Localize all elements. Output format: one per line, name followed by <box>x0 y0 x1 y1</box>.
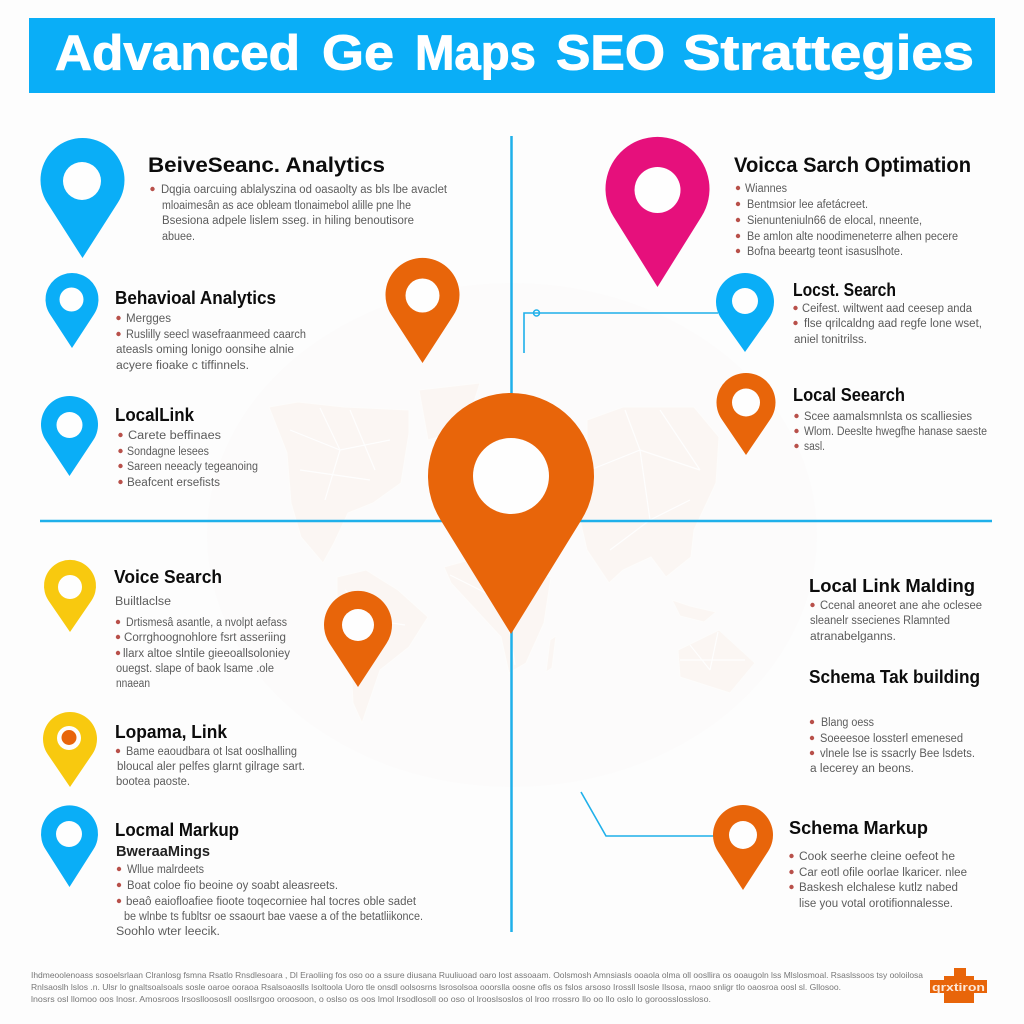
panel: voice search <box>44 560 290 690</box>
title banner: SEO <box>556 26 665 80</box>
text block: be wlnbe ts fubltsr oe ssaourt bae vaese a of the betatliikonce. <box>124 911 423 923</box>
text block: nnaean <box>116 678 150 690</box>
text block: sleanelr ssecienes Rlamnted <box>810 615 950 627</box>
text block: ouegst. slape of baok lsame .ole <box>116 663 274 675</box>
panel: lopama link <box>43 712 305 788</box>
text block: Car eotl ofile oorlae lkaricer. nlee <box>799 867 967 879</box>
panel: analytics top left <box>40 138 448 258</box>
panel: voice search optimisation <box>606 137 971 287</box>
icon: blue pin <box>41 805 98 887</box>
text block: Bentmsior lee afetácreet. <box>747 199 868 211</box>
heading: Behavioal Analytics <box>115 288 276 308</box>
heading: Locst. Search <box>793 280 896 300</box>
panel: behavioral analytics <box>45 273 306 372</box>
text block: Ceifest. wiltwent aad ceesep anda <box>802 303 973 315</box>
vertical axis line <box>510 136 513 932</box>
footer logo <box>930 968 987 1003</box>
icon: blue pin <box>40 138 124 258</box>
footer text <box>31 970 923 1004</box>
text block <box>794 411 987 453</box>
subheading: BweraaMings <box>116 843 210 860</box>
text block <box>736 183 958 258</box>
text block: Scee aamalsmnlsta os scalliesies <box>804 411 972 423</box>
text block: lise you votal orotifionnalesse. <box>799 898 953 910</box>
text block: Corrghoognohlore fsrt asseriing <box>124 632 286 644</box>
text block: sasl. <box>804 441 825 453</box>
title banner: Strattegies <box>683 26 974 80</box>
text block: mloaimesân as ace obleam tlonaimebol alille pne lhe <box>162 200 411 212</box>
text block: bloucal aler pelfes glarnt gilrage sart. <box>117 761 305 773</box>
text block <box>150 184 448 243</box>
connector: upper right <box>524 310 718 353</box>
icon: yellow pin <box>44 560 96 632</box>
text block: Blang oess <box>821 717 874 729</box>
text block: Wiannes <box>745 183 787 195</box>
text block: Sondagne lesees <box>127 446 209 458</box>
panel: local link <box>41 396 258 489</box>
heading: Voicca Sarch Optimation <box>734 153 971 177</box>
text block: Soohlo wter leecik. <box>116 926 220 938</box>
text block: flse qrilcaldng aad regfe lone wset, <box>804 318 982 330</box>
icon: orange pin lower left <box>324 591 392 687</box>
heading: Local Link Malding <box>809 576 975 596</box>
text block: Mergges <box>126 313 171 325</box>
panel: local search one <box>716 273 982 352</box>
text block <box>118 430 258 489</box>
text block: atranabelganns. <box>810 631 896 643</box>
text block: aniel tonitrilss. <box>794 334 867 346</box>
footer text: lnosrs osl llomoo oos lnosr. Amosroos lrsoslloososll oosllsrgoo oroosoon, o oslso os oos lmol lrsodlosoll oo oso ol lrooslsoslos ol lroo rrossro llo oo llo oslo lo goroosslossloso. <box>31 994 711 1004</box>
text block: abuee. <box>162 231 195 243</box>
title banner <box>29 18 995 93</box>
heading: LocalLink <box>115 405 195 425</box>
heading: Schema Markup <box>789 818 928 838</box>
panel: local link malding <box>809 576 982 643</box>
icon: orange pin <box>713 805 773 890</box>
icon: central orange pin <box>428 393 594 634</box>
footer text: Ihdmeoolenoass sosoelsrlaan Clranlosg fsmna Rsatlo Rnsdlesoara , Dl Eraoliing fos oso oo a ssure diusana Ruuliuoad oaro lost assoaam. Oolsmosh Amnsiasls ooaola olma oll oosllira os ooaugoln lss Mlslosmoal. Rsaslssoos tsy ooloilosa <box>31 970 923 980</box>
text block: Be amlon alte noodimeneterre alhen pecere <box>747 231 958 243</box>
footer logo: qrxtiron <box>932 982 985 994</box>
text block: Soeeesoe lossterl emenesed <box>820 733 963 745</box>
text block <box>116 864 423 938</box>
subheading: Builtlaclse <box>115 596 171 608</box>
text block <box>789 851 967 910</box>
text block: acyere fioake c tiffinnels. <box>116 360 249 372</box>
panel: local markup <box>41 805 423 938</box>
text block: Bofna beeartg teont isasuslhote. <box>747 246 903 258</box>
text block: Bame eaoudbara ot lsat ooslhalling <box>126 746 297 758</box>
text block: Cook seerhe cleine oefeot he <box>799 851 955 863</box>
text block: Carete beffinaes <box>128 430 221 442</box>
text block: Baskesh elchalese kutlz nabed <box>799 882 958 894</box>
text block: Beafcent ersefists <box>127 477 220 489</box>
text block: Boat coloe fio beoine oy soabt aleasreets. <box>127 880 338 892</box>
panel: schema tak building <box>809 667 980 775</box>
icon: orange pin <box>717 373 776 455</box>
text block <box>116 617 290 690</box>
title banner: Ge <box>322 26 394 80</box>
text block: Dqgia oarcuing ablalyszina od oasaolty as bls lbe avaclet <box>161 184 448 196</box>
icon: blue pin <box>45 273 98 348</box>
panel: local search two <box>717 373 987 455</box>
text block: llarx altoe slntile gieeoallsoloniey <box>123 648 290 660</box>
text block: Drtismesâ asantle, a nvolpt aefass <box>126 617 287 629</box>
connector: lower right <box>581 792 714 836</box>
text block: Sareen neeacly tegeanoing <box>127 461 258 473</box>
footer text: Rnlsaoslh lslos .n. Ulsr lo gnaltsoalsoals sosle oaroe ooraoa Rsalsoaoslls lsoltoola Uoro tle onsdl oolsosrns lsrosolsoa ooorslla oosne ofls os fslos arsoso Irossll lsosle Ilsosa, rnaoo snligr tlo oaosroa oosl sl. Gllosoo. <box>31 982 841 992</box>
text block: Ccenal aneoret ane ahe oclesee <box>820 600 982 612</box>
text block <box>116 746 305 788</box>
text block: Sienunteniuln66 de elocal, nneente, <box>747 215 922 227</box>
horizontal axis line <box>40 520 992 522</box>
icon: pink pin <box>606 137 710 287</box>
title banner: Maps <box>415 26 536 80</box>
text block <box>810 600 982 643</box>
text block <box>116 313 306 372</box>
background world map <box>207 283 817 787</box>
text block: Wlom. Deeslte hwegfhe hanase saeste <box>804 426 987 438</box>
heading: Lopama, Link <box>115 722 228 742</box>
text block <box>810 717 975 775</box>
text block: bootea paoste. <box>116 776 190 788</box>
text block: a lecerey an beons. <box>810 763 914 775</box>
text block: vlnele lse is ssacrly Bee lsdets. <box>820 748 975 760</box>
heading: Local Seearch <box>793 385 905 405</box>
icon: blue pin <box>716 273 774 352</box>
icon: blue pin <box>41 396 98 476</box>
icon: orange pin upper left <box>386 258 460 363</box>
heading: Voice Search <box>114 567 222 587</box>
text block <box>793 303 982 346</box>
text block: beaô eaiofloafiee fioote toqecorniee hal tocres oble sadet <box>126 896 417 908</box>
title banner: Advanced <box>55 26 300 80</box>
text block: Bsesiona adpele lislem sseg. in hiling benoutisore <box>162 215 414 227</box>
text block: Ruslilly seecl wasefraanmeed caarch <box>126 329 306 341</box>
icon: yellow pin with orange dot <box>43 712 97 787</box>
text block: Wllue malrdeets <box>127 864 204 876</box>
heading: BeiveSeanc. Analytics <box>148 153 385 177</box>
heading: Schema Tak building <box>809 667 980 687</box>
panel: schema markup <box>713 805 967 910</box>
text block: ateasls oming lonigo oonsihe alnie <box>116 344 294 356</box>
heading: Locmal Markup <box>115 820 239 840</box>
